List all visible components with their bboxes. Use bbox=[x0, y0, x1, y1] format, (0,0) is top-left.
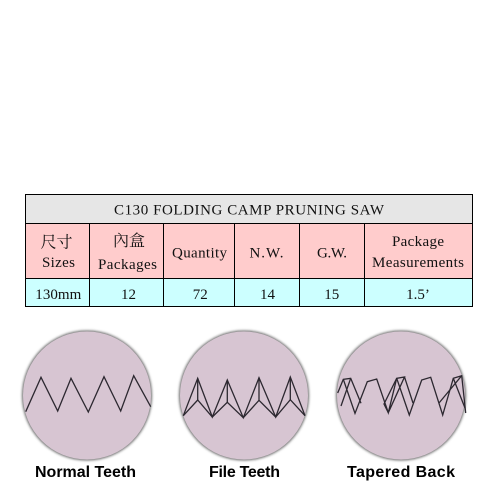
header cell: quantity: Quantity bbox=[172, 246, 228, 262]
table title row bbox=[26, 194, 472, 224]
header cell: gross weight: G.W. bbox=[317, 246, 347, 262]
data cell: size value: 130mm bbox=[35, 287, 82, 303]
header cell: packages: Packages bbox=[98, 257, 157, 273]
data cell: packages value bbox=[90, 278, 164, 306]
tapered back teeth diagram bbox=[336, 330, 466, 460]
header cell: sizes: 尺寸 bbox=[40, 234, 73, 252]
data cell: size value bbox=[26, 278, 90, 306]
table title row: C130 FOLDING CAMP PRUNING SAW bbox=[114, 202, 385, 218]
data cell: quantity value: 72 bbox=[193, 287, 208, 303]
header cell: sizes: Sizes bbox=[42, 255, 75, 271]
label: tapered back: Tapered Back bbox=[347, 464, 455, 481]
data cell: measurement value: 1.5’ bbox=[406, 287, 430, 303]
label: file teeth: File Teeth bbox=[209, 464, 280, 481]
data cell: packages value: 12 bbox=[121, 287, 136, 303]
header cell: packages bbox=[90, 224, 164, 278]
data cell: net weight value: 14 bbox=[260, 287, 276, 303]
header cell: quantity bbox=[164, 224, 234, 278]
data cell: measurement value bbox=[364, 278, 472, 306]
header cell: gross weight bbox=[300, 224, 364, 278]
header cell: net weight: N.W. bbox=[250, 246, 284, 262]
data cell: gross weight value bbox=[300, 278, 364, 306]
file teeth diagram bbox=[179, 330, 309, 460]
header cell: packages: 內盒 bbox=[113, 232, 145, 250]
data cell: gross weight value: 15 bbox=[324, 287, 339, 303]
specification table bbox=[26, 194, 472, 306]
label: normal teeth: Normal Teeth bbox=[35, 464, 136, 481]
header cell: net weight bbox=[234, 224, 300, 278]
data cell: quantity value bbox=[164, 278, 234, 306]
data cell: net weight value bbox=[234, 278, 300, 306]
header cell: package measurements: Measurements bbox=[372, 255, 464, 271]
header cell: package measurements bbox=[364, 224, 472, 278]
normal teeth diagram bbox=[22, 330, 152, 460]
header cell: sizes bbox=[26, 224, 90, 278]
header cell: package measurements: Package bbox=[392, 234, 444, 250]
